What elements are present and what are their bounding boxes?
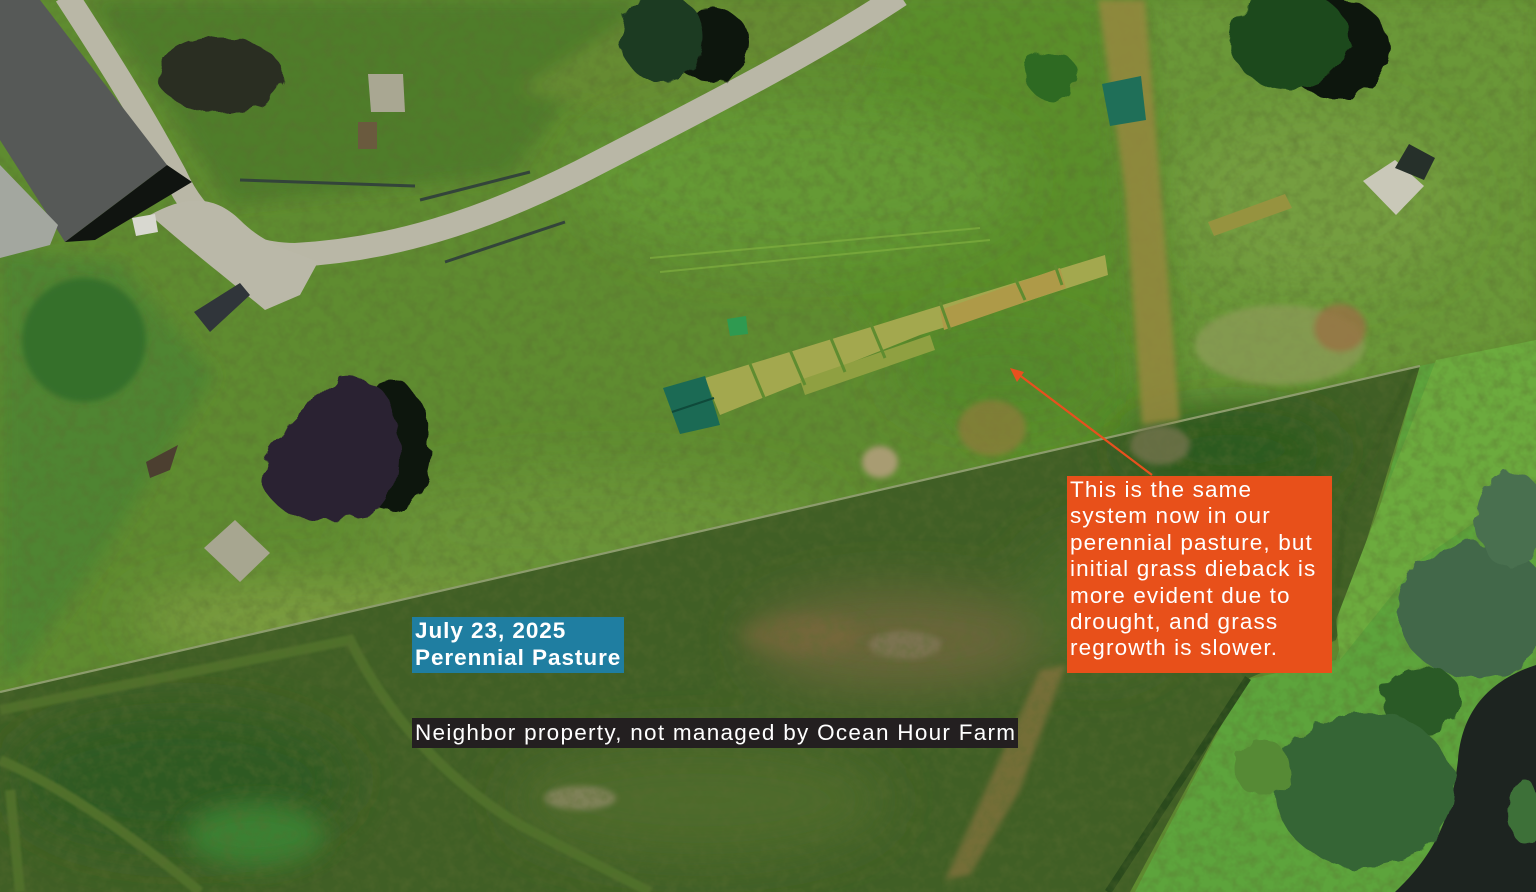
sheds and tents (132, 74, 1435, 582)
dark purple beech tree (262, 377, 430, 520)
dirt mown track (1098, 0, 1180, 425)
trees at top (158, 0, 1389, 113)
callout: same system orange box: more evident due to (1070, 583, 1291, 608)
round shrub patch left (22, 278, 146, 402)
fence line between properties (0, 366, 1420, 692)
neighbor property label: Neighbor property, not managed by Ocean Hour Farm (415, 720, 1016, 745)
neighbor property, darker field (0, 366, 1420, 892)
date and pasture label: Perennial Pasture (415, 644, 621, 670)
date and pasture label: July 23, 2025 (415, 618, 566, 643)
callout: same system orange box: regrowth is slower. (1070, 635, 1278, 660)
orange arrow pointing to pasture (1010, 368, 1152, 475)
callout: same system orange box: system now in our (1070, 503, 1271, 528)
bare patches in pasture (862, 304, 1366, 478)
callout: same system orange box: This is the same (1070, 477, 1252, 502)
right side bright meadow (1108, 340, 1536, 892)
brown mown paddock strips (705, 194, 1292, 415)
tire tracks in grass (650, 228, 990, 272)
roadside fences (240, 172, 565, 262)
river bank trees and pond (1234, 472, 1536, 892)
callout: same system orange box: drought, and grass (1070, 609, 1278, 634)
barn building (0, 0, 192, 258)
callout: same system orange box: perennial pasture, but (1070, 530, 1313, 555)
date and pasture label (412, 617, 624, 673)
callout: same system orange box: initial grass dieback is (1070, 556, 1316, 581)
callout: same system orange box (1067, 476, 1332, 673)
farm road (66, 0, 900, 255)
